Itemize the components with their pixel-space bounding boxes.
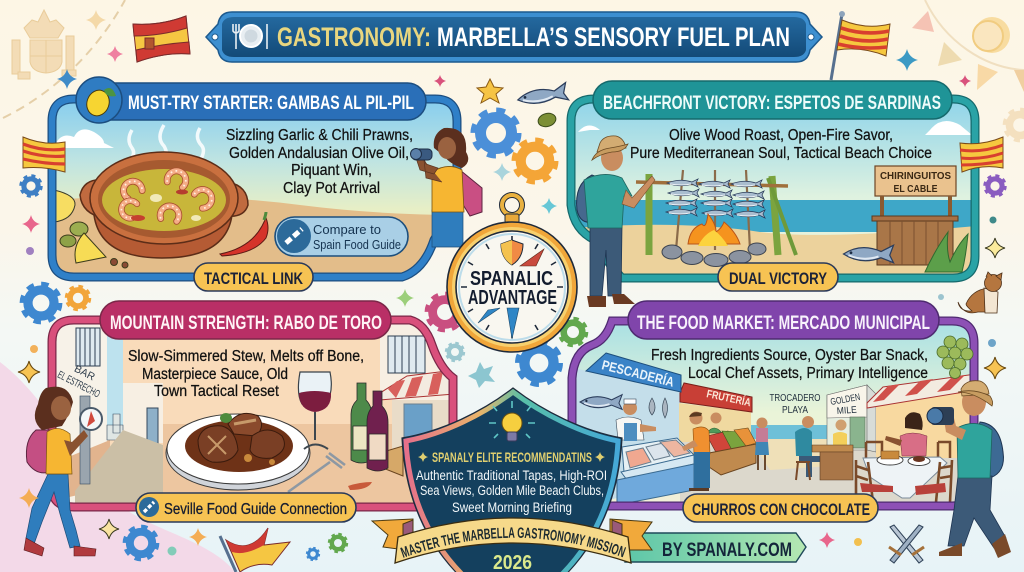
- icon: plate and cutlery: [233, 24, 267, 49]
- description text: Pure Mediterranean Soul, Tactical Beach Choice: [630, 145, 932, 162]
- shield heading: SPANALY ELITE RECOMMENDATINS: [432, 449, 592, 465]
- tag: churros con chocolate: CHURROS CON CHOCOLATE: [692, 500, 870, 519]
- compass shield and needles: [478, 240, 544, 339]
- tag: churros con chocolate: [683, 494, 878, 522]
- figure: man pointing at rack: [577, 136, 655, 307]
- market signage: MILE: [836, 405, 857, 417]
- flag: Catalan left: [23, 137, 65, 172]
- market signage: TROCADERO: [770, 393, 821, 404]
- kiosk people: [836, 420, 846, 430]
- compass: Spanalic advantage: ADVANTAGE: [468, 287, 557, 309]
- plate of oxtail stew: [166, 413, 310, 490]
- market signage: FRUTERÍA: [705, 387, 752, 409]
- description text: Golden Andalusian Olive Oil,: [229, 145, 409, 162]
- fish on the sand: [844, 245, 894, 263]
- flag: Catalan right: [960, 137, 1003, 172]
- decoration: sun and bunting: [912, 0, 1024, 92]
- fruit crates: [710, 430, 731, 452]
- title banner: [206, 12, 822, 62]
- market signage: [600, 357, 861, 417]
- header: food market: [628, 301, 939, 339]
- panel: gambas al pil-pil: [52, 77, 458, 291]
- description text: [128, 348, 364, 400]
- description text: Fresh Ingredients Source, Oyster Bar Snack,: [651, 347, 928, 364]
- link pill: compare to Spain food guide: Compare to: [313, 222, 381, 237]
- link pill: compare to Spain food guide: Spain Food Guide: [313, 237, 401, 252]
- background pink wash: [0, 362, 235, 572]
- shield: elite recommendations: [402, 388, 622, 572]
- sign: chiringuitos el cable: [875, 166, 956, 196]
- building right: [380, 324, 448, 400]
- compass text: SPANALIC: [470, 268, 553, 290]
- description text: [651, 347, 928, 382]
- market signage: GOLDEN: [830, 392, 861, 408]
- beach stall: [872, 196, 958, 265]
- header: mountain strength: MOUNTAIN STRENGTH: RABO DE TORO: [110, 313, 382, 334]
- tag: tactical link: [194, 263, 313, 291]
- fruit seller: [707, 428, 722, 433]
- gears: around compass and panels: [21, 112, 1005, 560]
- panel: rabo de toro: [52, 301, 455, 522]
- description text: [630, 127, 932, 162]
- flag: Catalan top right: [831, 11, 890, 80]
- description text: Town Tactical Reset: [154, 383, 280, 400]
- table: [163, 424, 413, 502]
- sign: bar el estrecho: EL ESTRECHO: [55, 369, 102, 400]
- grapes: [937, 336, 973, 378]
- cloud: [56, 129, 114, 148]
- tag: dual victory: [718, 263, 838, 291]
- wooden bar: [812, 445, 853, 452]
- awning: [382, 371, 448, 400]
- pescaderia sign: [586, 353, 681, 392]
- basket: [383, 446, 403, 476]
- wine bottles: [351, 383, 388, 471]
- old town street: [56, 324, 107, 502]
- panel: espetos de sardinas: [571, 81, 976, 291]
- link pill: Seville food guide: Seville Food Guide Connection: [164, 501, 347, 518]
- title text white: MARBELLA’S SENSORY FUEL PLAN: [437, 22, 790, 52]
- description text: Slow-Simmered Stew, Melts off Bone,: [128, 348, 364, 365]
- header: mountain strength: [100, 301, 391, 339]
- ribbon: master the Marbella gastronomy mission: MASTER THE MARBELLA GASTRONOMY MISSION: [400, 527, 626, 558]
- description text: Clay Pot Arrival: [283, 180, 380, 197]
- decoration: faint gear: [1006, 111, 1024, 139]
- title text gold: GASTRONOMY:: [277, 22, 431, 52]
- button: by spanaly.com: [625, 533, 806, 562]
- sign: bar el estrecho: [55, 357, 108, 400]
- fish counter: [622, 438, 694, 472]
- figure: walking woman with compass: [24, 387, 102, 556]
- olives and lemon wedge: [60, 222, 128, 268]
- flag: Spain top: [133, 16, 190, 62]
- tag: tactical link: TACTICAL LINK: [204, 270, 303, 288]
- shield body text: Sea Views, Golden Mile Beach Clubs,: [420, 483, 604, 498]
- balcony right: [388, 336, 425, 373]
- striped awning: [867, 374, 976, 408]
- sign: chiringuitos el cable: EL CABLE: [894, 183, 938, 195]
- shield body text: [416, 468, 607, 515]
- description text: Piquant Win,: [291, 162, 372, 179]
- compass: Spanalic advantage: [447, 195, 577, 352]
- compass ticks: [461, 236, 563, 338]
- header: beachfront victory: [593, 81, 952, 119]
- red chili: [220, 212, 268, 256]
- cat: [958, 272, 1002, 313]
- woman in blue: [756, 418, 768, 428]
- floor: [680, 442, 958, 502]
- button: by spanaly.com: BY SPANALY.COM: [662, 540, 792, 561]
- icon: light bulb: [489, 401, 535, 441]
- tag: dual victory: DUAL VICTORY: [729, 270, 827, 288]
- description text: [226, 127, 413, 197]
- front chairs: [856, 460, 952, 502]
- cafe woman: [906, 413, 920, 427]
- clay pot with prawns: [80, 152, 248, 258]
- header: must-try starter: MUST-TRY STARTER: GAMBAS AL PIL-PIL: [128, 93, 414, 114]
- fork: [288, 453, 345, 492]
- fish stall back wall: [576, 369, 681, 500]
- man in orange: [693, 427, 710, 454]
- dried chili: [348, 482, 372, 490]
- description text: Olive Wood Roast, Open-Fire Savor,: [669, 127, 893, 144]
- fish display: [580, 395, 622, 409]
- campfire: [662, 214, 766, 266]
- lemon slice: [54, 190, 75, 222]
- balcony left: [76, 328, 100, 366]
- description text: Masterpiece Sauce, Old: [142, 366, 288, 383]
- steam: [129, 125, 203, 164]
- figure: woman photographer: [410, 128, 482, 247]
- white kiosk: [827, 385, 867, 450]
- flag: Spain bottom: [220, 528, 290, 572]
- figure: male photographer walking: [927, 381, 1011, 558]
- ribbon: master the Marbella gastronomy mission: [370, 517, 653, 564]
- sign: chiringuitos el cable: CHIRINGUITOS: [880, 170, 951, 182]
- green plant: [925, 232, 968, 272]
- description text: Local Chef Assets, Primary Intelligence: [688, 365, 928, 382]
- shield body text: Authentic Traditional Tapas, High-ROI: [416, 468, 607, 483]
- back chairs: [866, 442, 950, 458]
- wine glass: [298, 372, 331, 449]
- cafe wall: [876, 393, 970, 458]
- bamboo rack with sardines: [636, 170, 796, 255]
- market signage: PLAYA: [782, 405, 808, 416]
- shield body text: Sweet Morning Briefing: [452, 500, 572, 515]
- decoration: coat of arms: [12, 10, 76, 79]
- sign: bar el estrecho: BAR: [72, 363, 97, 384]
- description text: Sizzling Garlic & Chili Prawns,: [226, 127, 413, 144]
- shield heading: [418, 449, 605, 465]
- fish and olive decoration: [516, 83, 569, 129]
- table with churros: [863, 457, 947, 498]
- market signage: PESCADERÍA: [600, 357, 676, 390]
- panel: mercado municipal: [572, 301, 976, 522]
- crossed swords: [889, 525, 924, 563]
- fishmonger: [616, 417, 644, 440]
- link pill: compare to Spain food guide: [275, 217, 408, 256]
- link pill: Seville food guide: [136, 493, 356, 522]
- fruit stall: [679, 403, 751, 442]
- background dashed route: [3, 0, 125, 118]
- header: must-try starter: [76, 77, 426, 123]
